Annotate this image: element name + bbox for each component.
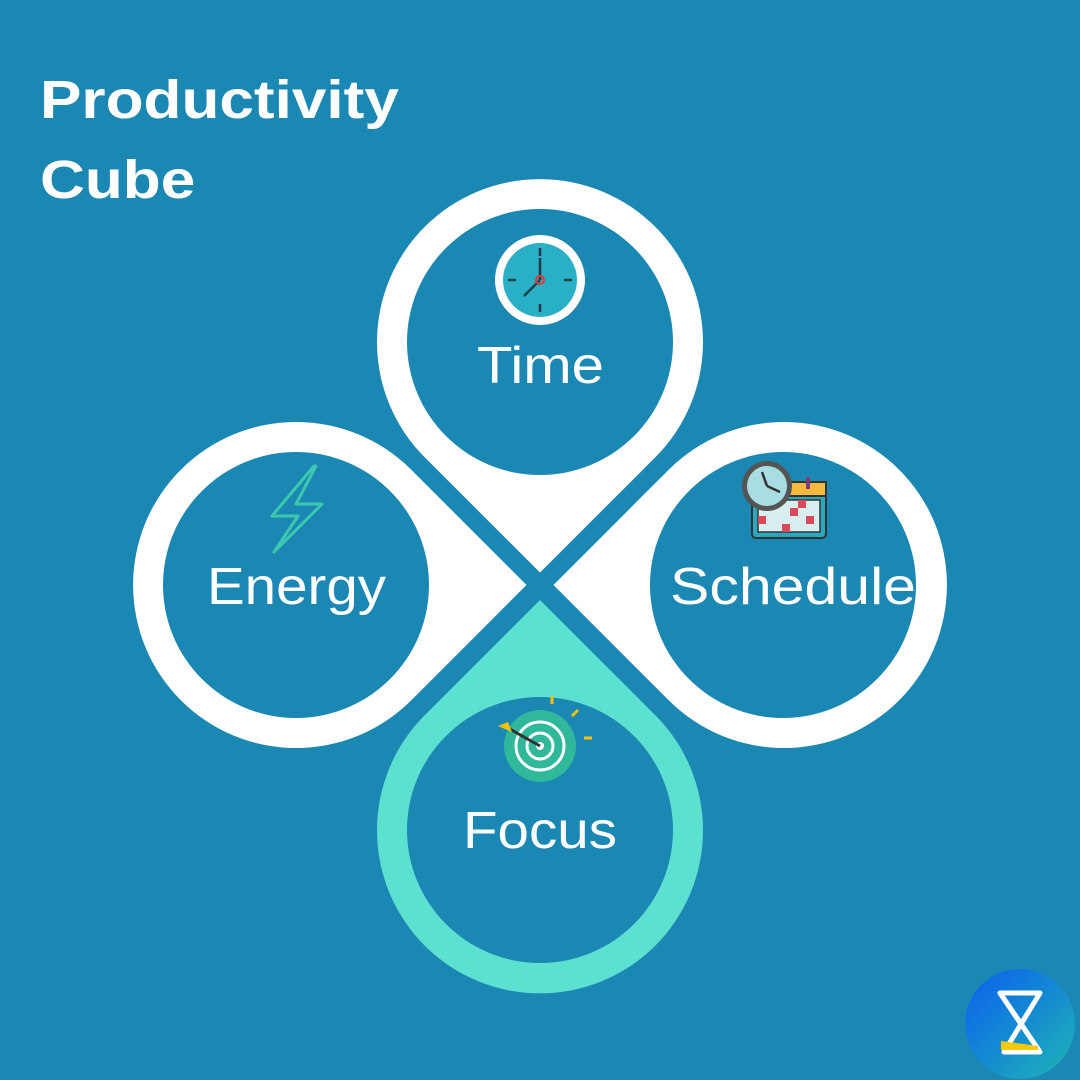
icon: lightning bbox=[272, 466, 322, 552]
logo bbox=[965, 969, 1075, 1079]
icon: clock bbox=[495, 235, 585, 325]
label: schedule: Schedule bbox=[670, 558, 916, 616]
title bbox=[40, 70, 399, 210]
icon: target bbox=[498, 696, 592, 782]
label: energy: Energy bbox=[207, 558, 386, 616]
label: time: Time bbox=[477, 337, 604, 395]
icon: schedule bbox=[742, 461, 826, 538]
petal: energy bbox=[133, 422, 527, 748]
petal: schedule bbox=[554, 422, 947, 748]
title: Cube bbox=[40, 150, 195, 210]
label: focus: Focus bbox=[463, 802, 617, 860]
petal: focus bbox=[377, 600, 703, 993]
title: Productivity bbox=[40, 70, 399, 130]
petal: time bbox=[377, 179, 703, 573]
